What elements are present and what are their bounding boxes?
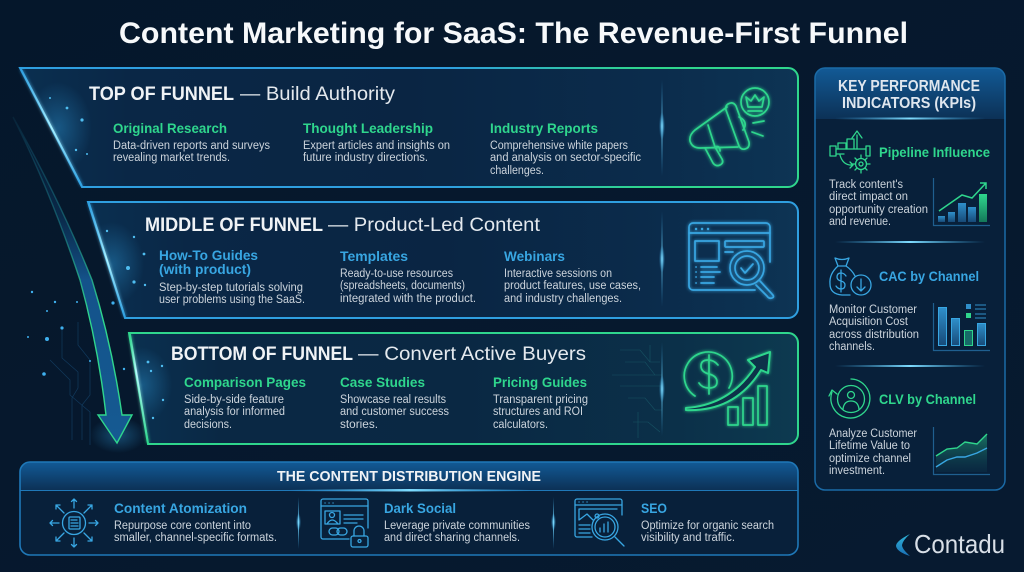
item: CAC by channel: across distribution xyxy=(829,329,919,341)
logo: Contadu: Contadu xyxy=(914,529,1005,559)
item: CLV by channel: optimize channel xyxy=(829,453,911,465)
item: original research: Data-driven reports and surveys xyxy=(113,140,270,152)
item: templates: Templates xyxy=(340,248,408,264)
item: pricing guides xyxy=(493,374,588,431)
heading: middle of funnel xyxy=(145,214,541,236)
icon: seo xyxy=(575,499,624,546)
panel: bottom of funnel xyxy=(112,333,798,444)
item: industry reports: Comprehensive white papers xyxy=(490,140,628,152)
item: content atomization: Content Atomization xyxy=(114,500,247,516)
icon: dark social xyxy=(321,499,368,547)
item: thought leadership xyxy=(303,120,450,164)
heading: distribution: THE CONTENT DISTRIBUTION ENGINE xyxy=(277,468,541,485)
item: comparison pages: Side-by-side feature xyxy=(184,394,284,406)
item: pricing guides: calculators. xyxy=(493,419,548,431)
item: thought leadership: Expert articles and insights on xyxy=(303,140,450,152)
chart: CLV lines xyxy=(934,427,990,474)
item: seo: Optimize for organic search xyxy=(641,520,774,532)
item: CLV by channel: investment. xyxy=(829,465,885,477)
item: pipeline influence xyxy=(829,144,990,228)
item: seo: visibility and traffic. xyxy=(641,532,735,544)
item: thought leadership: Thought Leadership xyxy=(303,120,433,136)
item: industry reports: and analysis on sector-specific xyxy=(490,152,641,164)
item: dark social: Dark Social xyxy=(384,500,456,516)
item: pipeline influence: direct impact on xyxy=(829,191,908,203)
item: industry reports: Industry Reports xyxy=(490,120,598,136)
funnel direction arrow xyxy=(13,117,132,443)
item: how-to guides: Step-by-step tutorials solving xyxy=(159,282,303,294)
icon: browser window with magnifier xyxy=(689,223,774,298)
heading: top of funnel: TOP OF FUNNEL xyxy=(89,83,234,105)
heading: middle of funnel: MIDDLE OF FUNNEL xyxy=(145,214,323,236)
item: CAC by channel: CAC by Channel xyxy=(879,268,979,284)
heading: KPIs xyxy=(838,78,980,112)
item: dark social: and direct sharing channels. xyxy=(384,532,520,544)
item: templates: (spreadsheets, documents) xyxy=(340,280,465,292)
panel: middle of funnel xyxy=(80,202,798,318)
item: how-to guides xyxy=(159,247,305,306)
item: comparison pages: analysis for informed xyxy=(184,406,285,418)
item: pipeline influence: Track content's xyxy=(829,179,903,191)
item: webinars: Interactive sessions on xyxy=(504,268,612,280)
item: how-to guides: (with product) xyxy=(159,261,251,277)
item: pricing guides: Transparent pricing xyxy=(493,394,588,406)
item: industry reports xyxy=(490,120,641,177)
heading: top of funnel xyxy=(89,83,395,105)
item: CLV by channel: CLV by Channel xyxy=(879,391,976,407)
background circuit traces and particles xyxy=(27,291,146,453)
item: original research: Original Research xyxy=(113,120,227,136)
panel: KPIs xyxy=(815,68,1005,490)
item: CLV by channel xyxy=(829,391,976,477)
title: Content Marketing for SaaS: The Revenue-First Funnel xyxy=(119,17,908,50)
panel: content distribution engine xyxy=(20,462,798,555)
item: templates: Ready-to-use resources xyxy=(340,268,453,280)
item: industry reports: challenges. xyxy=(490,165,544,177)
item: CAC by channel xyxy=(829,268,979,353)
item: CLV by channel: Lifetime Value to xyxy=(829,440,910,452)
item: content atomization: smaller, channel-specific formats. xyxy=(114,532,277,544)
item: CLV by channel: Analyze Customer xyxy=(829,428,917,440)
icon: megaphone with crown xyxy=(690,88,769,166)
item: pipeline influence: and revenue. xyxy=(829,216,891,228)
item: comparison pages xyxy=(184,374,306,431)
circuit traces near divider xyxy=(612,345,662,438)
item: case studies: Showcase real results xyxy=(340,394,446,406)
item: comparison pages: Comparison Pages xyxy=(184,374,306,390)
heading: KPIs: KEY PERFORMANCE xyxy=(838,78,980,95)
chart: CAC bars xyxy=(934,303,990,350)
item: case studies: stories. xyxy=(340,419,378,431)
icon: content atomization xyxy=(50,499,98,547)
item: CAC by channel: channels. xyxy=(829,341,875,353)
item: pipeline influence: opportunity creation xyxy=(829,204,928,216)
heading: bottom of funnel: BOTTOM OF FUNNEL xyxy=(171,343,353,365)
icon: pipeline influence xyxy=(830,131,870,173)
chart: pipeline bars xyxy=(934,178,990,226)
item: webinars: Webinars xyxy=(504,248,565,264)
item: content atomization: Repurpose core content into xyxy=(114,520,251,532)
item: case studies: and customer success xyxy=(340,406,449,418)
item: templates: integrated with the product. xyxy=(340,293,476,305)
item: dark social xyxy=(384,500,530,544)
heading: bottom of funnel xyxy=(171,343,586,365)
item: seo: SEO xyxy=(641,500,667,516)
heading: KPIs: INDICATORS (KPIs) xyxy=(842,95,976,112)
panel: top of funnel xyxy=(20,68,798,187)
item: case studies: Case Studies xyxy=(340,374,425,390)
heading: bottom of funnel: — Convert Active Buyers xyxy=(358,343,586,365)
item: content atomization xyxy=(114,500,277,544)
item: pricing guides: Pricing Guides xyxy=(493,374,587,390)
heading: top of funnel: — Build Authority xyxy=(240,83,395,105)
item: how-to guides: How-To Guides xyxy=(159,247,258,263)
item: CAC by channel: Acquisition Cost xyxy=(829,316,909,328)
item: how-to guides: user problems using the SaaS. xyxy=(159,294,305,306)
heading: middle of funnel: — Product-Led Content xyxy=(328,214,541,236)
item: original research: revealing market trends. xyxy=(113,152,230,164)
item: templates xyxy=(340,248,476,305)
item: webinars: and industry challenges. xyxy=(504,293,622,305)
item: thought leadership: future industry directions. xyxy=(303,152,428,164)
item: pipeline influence: Pipeline Influence xyxy=(879,144,990,160)
item: original research xyxy=(113,120,270,164)
item: case studies xyxy=(340,374,449,431)
item: seo xyxy=(641,500,774,544)
icon: CAC money bag xyxy=(830,258,871,295)
item: webinars xyxy=(504,248,641,305)
item: webinars: product features, use cases, xyxy=(504,280,641,292)
item: dark social: Leverage private communities xyxy=(384,520,530,532)
icon: CLV circular arrow with person xyxy=(829,379,870,418)
icon: dollar with growth arrow and bars xyxy=(684,352,770,425)
item: CAC by channel: Monitor Customer xyxy=(829,304,917,316)
item: comparison pages: decisions. xyxy=(184,419,232,431)
item: pricing guides: structures and ROI xyxy=(493,406,583,418)
